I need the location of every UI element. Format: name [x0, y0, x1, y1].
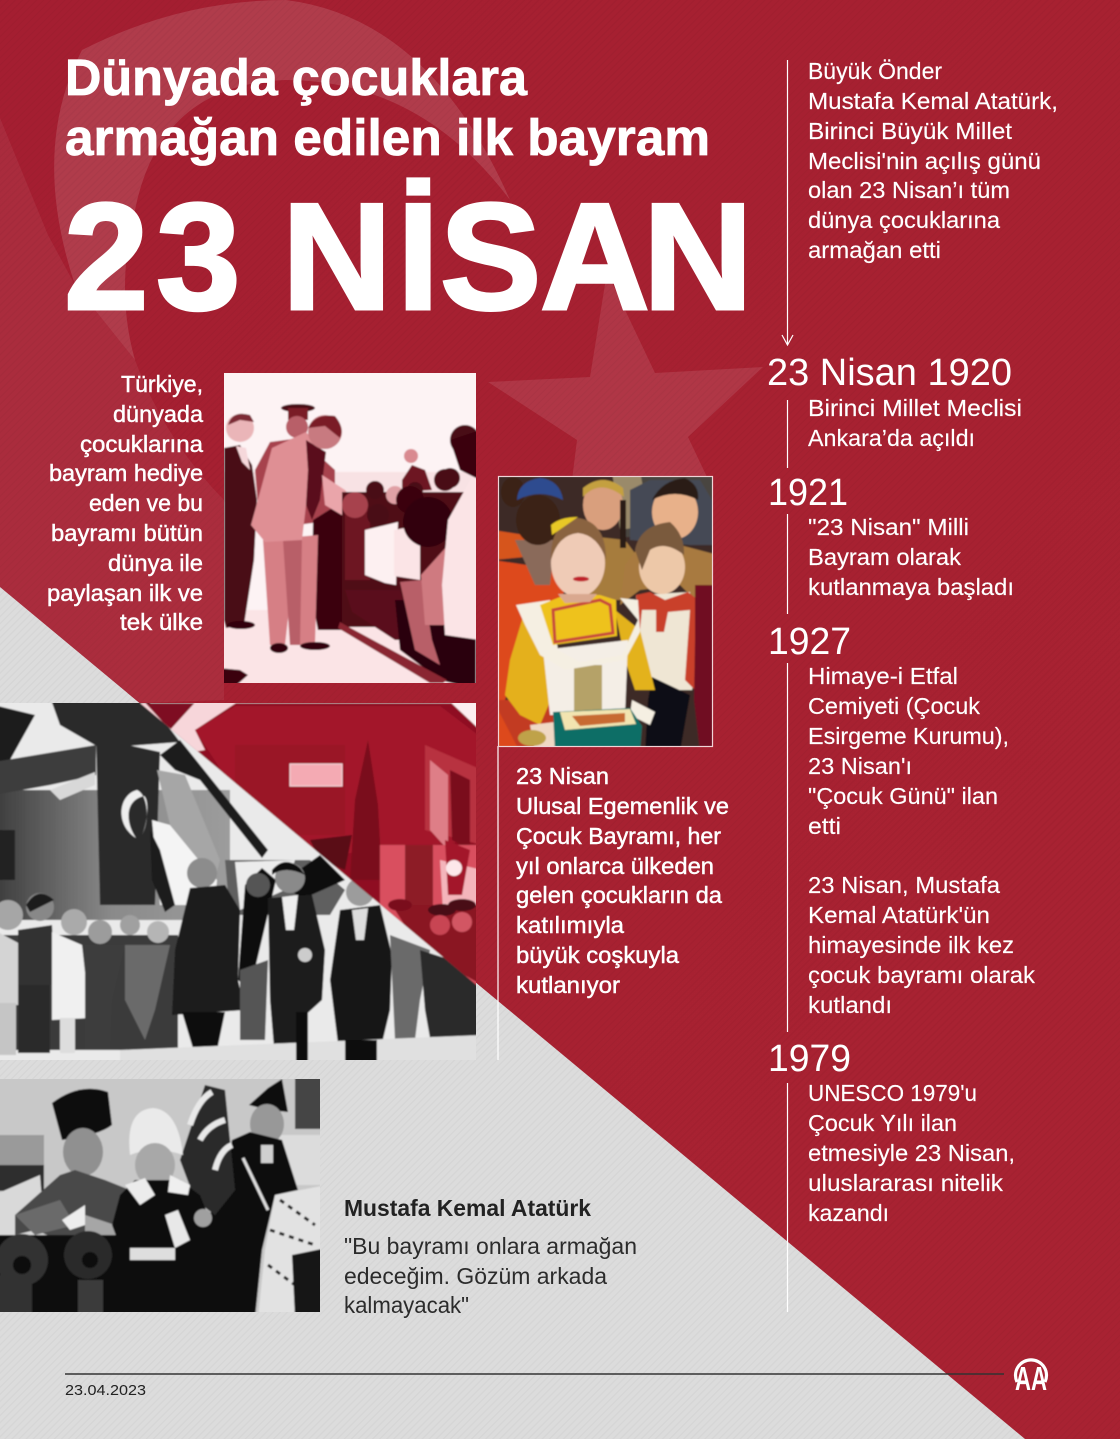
- quote: Mustafa Kemal Atatürk: [344, 1195, 637, 1318]
- boy in white and red: [635, 522, 718, 752]
- title: armağan edilen ilk bayram: [65, 109, 710, 166]
- ground: [120, 1034, 476, 1060]
- timeline: 1927: himayesinde ilk kez: [808, 932, 1014, 958]
- timeline: 1979: kazandı: [808, 1200, 889, 1226]
- left man in dark suit: [224, 414, 257, 629]
- timeline: 1921: [768, 472, 1014, 614]
- middle caption text: büyük coşkuyla: [516, 942, 679, 968]
- arrow: intro to timeline: [782, 60, 793, 345]
- title: 23 NİSAN: [64, 172, 753, 342]
- middle caption text: yıl onlarca ülkeden: [516, 853, 714, 879]
- intro text: Büyük Önder: [808, 58, 942, 84]
- middle caption text: katılımıyla: [516, 912, 624, 938]
- timeline: 1979: Çocuk Yılı ilan: [808, 1110, 957, 1136]
- officer: [255, 404, 335, 530]
- red tinted scene: [140, 697, 482, 988]
- left text block: dünya ile: [108, 550, 203, 576]
- timeline: 1927: Esirgeme Kurumu),: [808, 723, 1009, 749]
- timeline: 1979: UNESCO 1979'u: [808, 1080, 977, 1106]
- photo: Atatürk with a child: [0, 1073, 326, 1318]
- left text block: eden ve bu: [89, 490, 203, 516]
- quote: Mustafa Kemal Atatürk: "Bu bayramı onlara armağan: [344, 1233, 637, 1259]
- left text block: tek ülke: [120, 609, 203, 635]
- black and white scene: [0, 697, 482, 1066]
- people: children: [0, 893, 178, 1055]
- quote: Mustafa Kemal Atatürk: kalmayacak": [344, 1292, 469, 1318]
- flag: [180, 1085, 235, 1215]
- timeline: 1927: Himaye-i Etfal: [808, 663, 958, 689]
- left text block: Türkiye,: [121, 371, 203, 397]
- gift box: [518, 708, 642, 752]
- timeline: 1927: etti: [808, 813, 841, 839]
- timeline: 1921: "23 Nisan" Milli: [808, 514, 969, 540]
- middle caption text: [516, 763, 729, 998]
- timeline: 1927: "Çocuk Günü" ilan: [808, 783, 998, 809]
- people: three men in dark coats: [172, 858, 476, 1048]
- intro text: Mustafa Kemal Atatürk,: [808, 88, 1058, 114]
- quote: Mustafa Kemal Atatürk: edeceğim. Gözüm arkada: [344, 1263, 607, 1289]
- intro text: [808, 58, 1058, 263]
- timeline: 1979: uluslararası nitelik: [808, 1170, 1004, 1196]
- middle caption text: Çocuk Bayramı, her: [516, 823, 721, 849]
- middle caption text: kutlanıyor: [516, 972, 620, 998]
- timeline: 23 Nisan 1920: 23 Nisan 1920: [767, 352, 1012, 394]
- timeline: 1921: Bayram olarak: [808, 544, 962, 570]
- timeline: 1927: [768, 621, 1036, 1032]
- timeline: 1979: [768, 1038, 1015, 1312]
- middle caption text: Ulusal Egemenlik ve: [516, 793, 729, 819]
- left text block: [47, 371, 203, 635]
- timeline: 1927: 23 Nisan, Mustafa: [808, 872, 1000, 898]
- man in fur hat: [14, 1088, 127, 1236]
- man in dark hat: [204, 1079, 298, 1312]
- intro text: Meclisi'nin açılış günü: [808, 148, 1041, 174]
- child with white hat: [111, 1108, 214, 1312]
- left text block: paylaşan ilk ve: [47, 580, 203, 606]
- vertical rule beside photo caption: [497, 746, 499, 1060]
- timeline: 1927: 1927: [768, 621, 851, 663]
- left boy in orange: [499, 477, 564, 746]
- timeline: 1927: çocuk bayramı olarak: [808, 962, 1036, 988]
- intro text: armağan etti: [808, 237, 941, 263]
- background man: [402, 449, 432, 492]
- timeline: 23 Nisan 1920: [767, 352, 1022, 468]
- group of children: [342, 425, 480, 689]
- left text block: bayram hediye: [49, 460, 203, 486]
- timeline: 1979: etmesiyle 23 Nisan,: [808, 1140, 1015, 1166]
- left text block: bayramı bütün: [51, 520, 203, 546]
- photo: parade, black and white with red section: [0, 697, 482, 1066]
- photo: Atatürk with children, red tint: [218, 367, 482, 689]
- middle caption text: 23 Nisan: [516, 763, 609, 789]
- title: Dünyada çocuklara: [65, 49, 528, 106]
- table cover: [258, 1186, 320, 1312]
- main girl in yellow: [493, 517, 655, 752]
- photo: children in national costumes: [493, 471, 718, 752]
- timeline: 1927: Kemal Atatürk'ün: [808, 902, 990, 928]
- right boy: [620, 478, 718, 605]
- timeline: 1927: kutlandı: [808, 992, 892, 1018]
- timeline: 23 Nisan 1920: Ankara’da açıldı: [808, 425, 975, 451]
- intro text: olan 23 Nisan’ı tüm: [808, 177, 1010, 203]
- left text block: çocuklarına: [80, 431, 203, 457]
- background: grey diagonal panel: [0, 587, 1025, 1439]
- background: flag star: [488, 272, 763, 480]
- background: flag crescent: [0, 0, 510, 703]
- footer date: 23.04.2023: [65, 1382, 146, 1399]
- timeline: 1979: 1979: [768, 1038, 851, 1080]
- middle caption text: gelen çocukların da: [516, 882, 722, 908]
- timeline: 23 Nisan 1920: Birinci Millet Meclisi: [808, 395, 1022, 421]
- centre girl: [580, 480, 640, 600]
- intro text: dünya çocuklarına: [808, 207, 1000, 233]
- main figure: [250, 414, 347, 654]
- title: [64, 49, 753, 342]
- left text block: dünyada: [113, 401, 203, 427]
- quote: Mustafa Kemal Atatürk: Mustafa Kemal Atatürk: [344, 1195, 591, 1221]
- icon: AA logo: [1015, 1360, 1047, 1397]
- footer rule: [65, 1373, 1004, 1375]
- timeline: 1921: 1921: [768, 472, 848, 514]
- sofa: [0, 1231, 130, 1318]
- timeline: 1927: Cemiyeti (Çocuk: [808, 693, 980, 719]
- intro text: Birinci Büyük Millet: [808, 118, 1013, 144]
- timeline: 1927: 23 Nisan'ı: [808, 753, 912, 779]
- timeline: 1921: kutlanmaya başladı: [808, 574, 1014, 600]
- photo frame: [498, 476, 712, 746]
- pipe on ground: [338, 622, 447, 683]
- icon: AA logo: AA: [1015, 1360, 1047, 1397]
